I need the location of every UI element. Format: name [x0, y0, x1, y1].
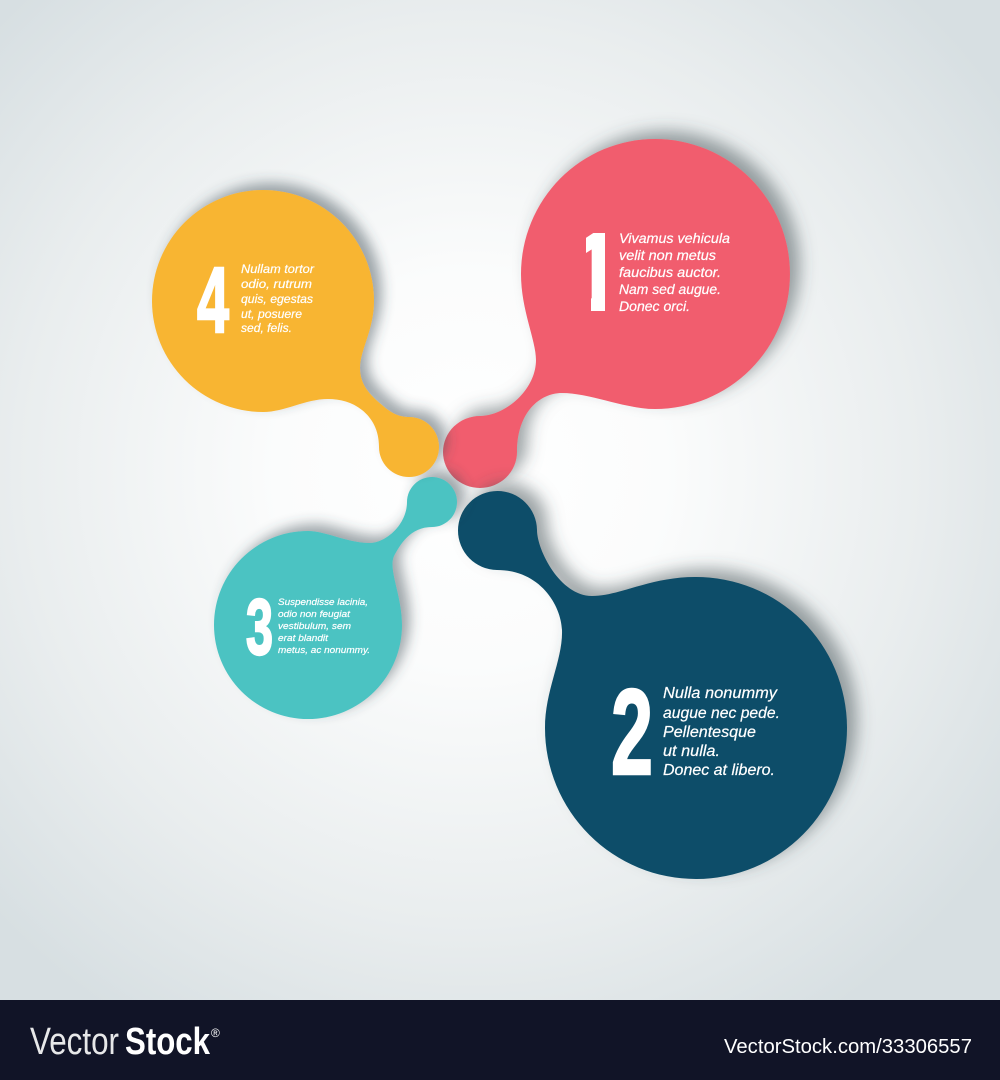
number 1: 1 [567, 211, 629, 335]
text block: step 4: quis, egestas [241, 292, 313, 306]
yellow metaball shape [152, 190, 439, 477]
image id text: VectorStock.com/33306557 [724, 1036, 972, 1058]
VectorStock logo: Stock [125, 1021, 211, 1063]
text block: step 4 [241, 262, 315, 335]
text block: step 2: augue nec pede. [663, 705, 780, 722]
red metaball shape [443, 139, 790, 488]
footer bar [0, 1000, 1000, 1080]
text block: step 2: Donec at libero. [663, 762, 775, 779]
text block: step 3 [278, 597, 370, 656]
text block: step 2: ut nulla. [663, 743, 720, 760]
text block: step 4: sed, felis. [241, 321, 292, 335]
text block: step 4: ut, posuere [241, 307, 302, 321]
panel: step 3 teal bubble [214, 477, 457, 719]
text block: step 1 [619, 231, 731, 314]
text block: step 1: velit non metus [619, 248, 716, 263]
text block: step 1: Donec orci. [619, 299, 690, 314]
text block: step 2 [663, 685, 780, 779]
text block: step 1: faucibus auctor. [619, 265, 721, 280]
text block: step 4: odio, rutrum [241, 277, 312, 291]
text block: step 3: vestibulum, sem [278, 621, 351, 632]
text block: step 1: Nam sed augue. [619, 282, 721, 297]
text block: step 3: erat blandit [278, 633, 328, 644]
text block: step 2: Nulla nonummy [663, 685, 778, 702]
text block: step 2: Pellentesque [663, 724, 756, 741]
number 4: 4 [197, 248, 229, 352]
text block: step 3: odio non feugiat [278, 609, 350, 620]
panel: step 4 yellow bubble [152, 190, 439, 477]
number 3: 3 [246, 582, 273, 671]
text block: step 1: Vivamus vehicula [619, 231, 731, 246]
panel: step 1 red bubble [443, 139, 790, 488]
VectorStock logo [30, 1021, 220, 1063]
navy metaball shape [458, 491, 847, 879]
text block: step 3: metus, ac nonummy. [278, 645, 370, 656]
VectorStock logo: Vector [30, 1021, 119, 1063]
number 2: 2 [611, 664, 653, 800]
teal metaball shape [214, 477, 457, 719]
text block: step 4: Nullam tortor [241, 262, 315, 276]
text block: step 3: Suspendisse lacinia, [278, 597, 368, 608]
panel: step 2 navy bubble [458, 491, 847, 879]
VectorStock logo: ® [211, 1026, 220, 1040]
